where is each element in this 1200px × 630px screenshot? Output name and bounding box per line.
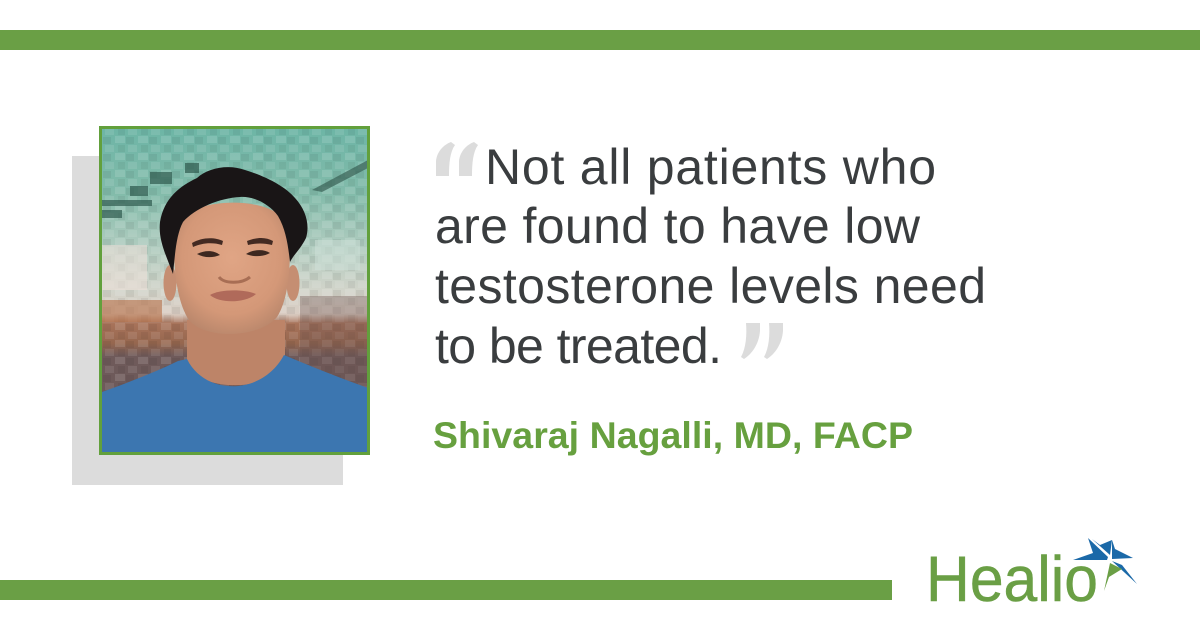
eyes [197, 250, 270, 257]
logo wordmark: Healio [926, 543, 1098, 615]
portrait photo [100, 128, 369, 454]
mosaic wall background [102, 129, 367, 392]
top green bar [0, 30, 1200, 50]
grey offset panel behind portrait [72, 156, 343, 485]
ears [164, 265, 176, 301]
bottom green bar [0, 580, 892, 600]
attribution name: Shivaraj Nagalli, MD, FACP [433, 414, 913, 456]
nose [219, 277, 250, 282]
quote text: Not all patients who [485, 139, 936, 195]
green photo border [100, 128, 368, 454]
closing quotation mark [741, 323, 783, 359]
quote text: testosterone levels need [435, 258, 986, 314]
logo star icon [1073, 538, 1137, 591]
blue shirt [102, 355, 368, 453]
eyebrows [192, 238, 273, 247]
quote text: are found to have low [435, 198, 921, 254]
mouth [210, 290, 256, 301]
neck [187, 320, 285, 385]
quote text [435, 139, 986, 374]
Healio logo [926, 538, 1137, 615]
hair [160, 167, 308, 274]
quote text: to be treated. [435, 318, 722, 374]
opening quotation mark [436, 142, 478, 176]
face [174, 203, 290, 334]
